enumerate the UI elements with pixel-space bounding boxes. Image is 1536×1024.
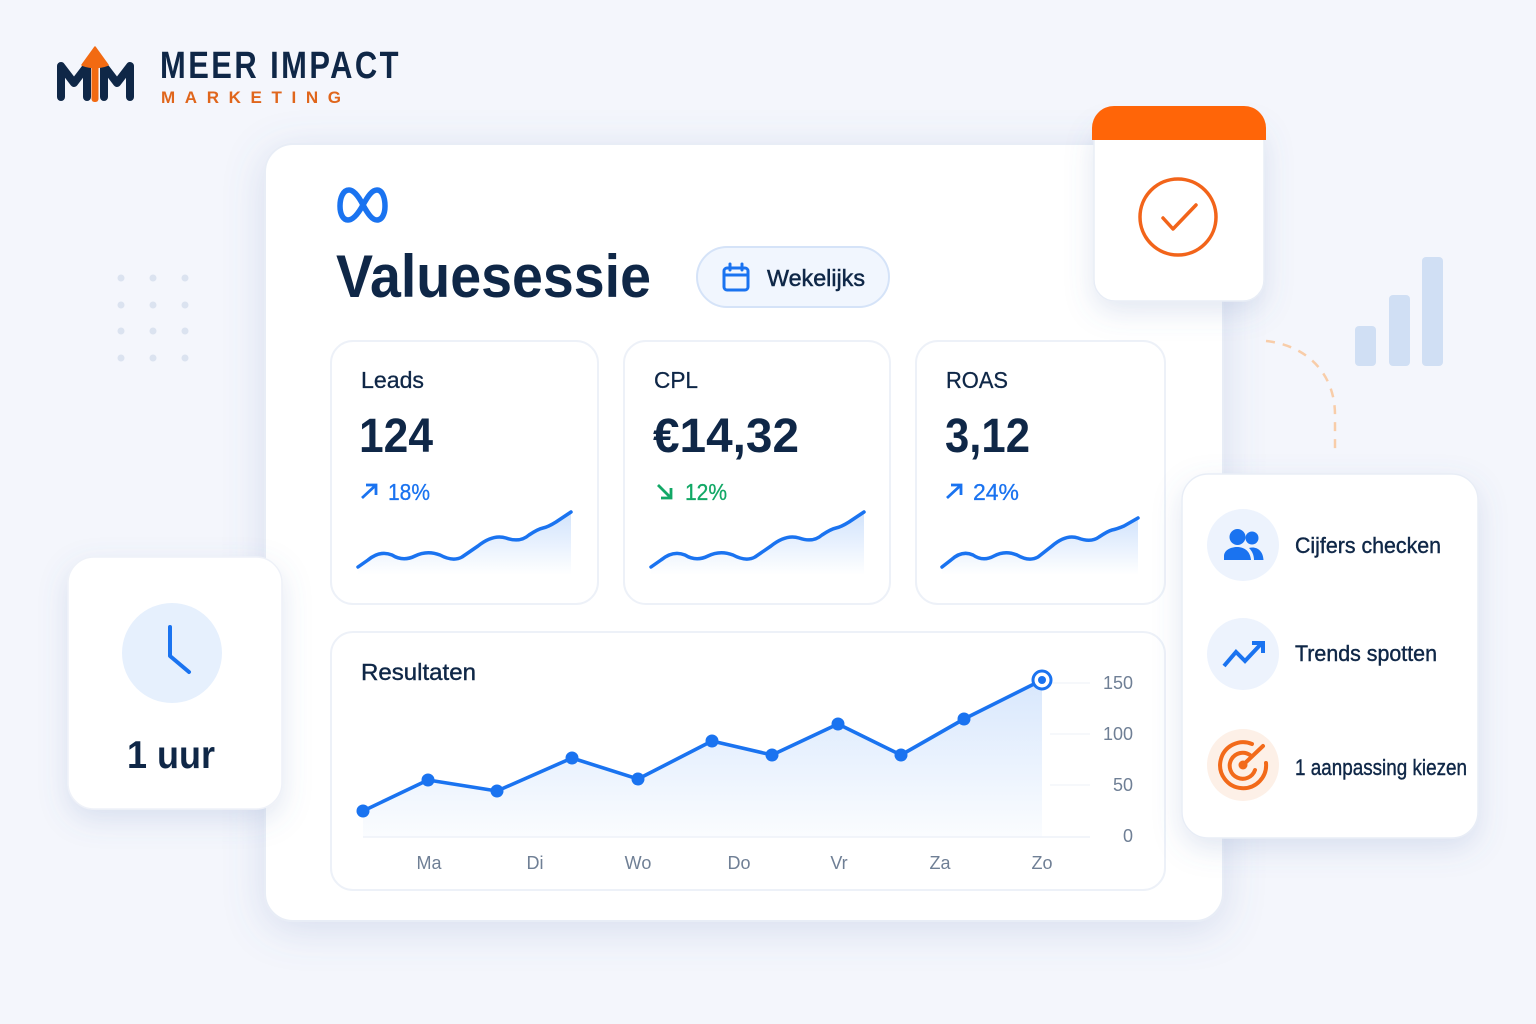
icon: arrow down — [658, 485, 671, 498]
decorative dashed arc — [1266, 341, 1335, 454]
x axis labels: Di — [526, 853, 544, 873]
x axis labels — [416, 853, 1053, 873]
sparkline: leads — [358, 512, 571, 575]
logo — [61, 45, 401, 107]
title: Valuesessie — [336, 243, 651, 310]
delta: 18%: 18% — [388, 479, 430, 505]
icon: calendar — [724, 264, 748, 290]
decorative bar chart — [1355, 257, 1443, 366]
x axis labels: Do — [727, 853, 751, 873]
badge: wekelijks — [697, 247, 889, 307]
heading: resultaten: Resultaten — [361, 659, 476, 685]
value: cpl: €14,32 — [653, 410, 799, 463]
label: cpl: CPL — [654, 367, 698, 393]
logo wordmark: MEER IMPACT — [160, 45, 401, 87]
panel: dashboard — [265, 144, 1223, 921]
decorative dot grid — [118, 274, 188, 362]
y axis labels: 50 — [1113, 775, 1133, 795]
item: trends spotten — [1207, 618, 1437, 690]
card: leads — [331, 341, 598, 604]
icon: target — [1207, 729, 1279, 801]
delta: 12%: 12% — [685, 479, 727, 505]
card: calendar check — [1092, 106, 1266, 301]
x axis labels: Wo — [625, 853, 651, 873]
label: leads: Leads — [361, 367, 424, 393]
icon: arrow up — [362, 485, 376, 498]
panel: checklist — [1182, 474, 1478, 838]
value: roas: 3,12 — [945, 410, 1030, 463]
icon: clock — [122, 603, 222, 703]
card: duration — [68, 557, 282, 809]
y axis labels — [1103, 673, 1133, 846]
card: cpl — [624, 341, 890, 604]
logo tagline: MARKETING — [161, 88, 341, 107]
icon: arrow up — [947, 485, 961, 498]
y axis labels: 0 — [1123, 826, 1133, 846]
text: Cijfers checken — [1295, 533, 1441, 558]
x axis labels: Zo — [1031, 853, 1053, 873]
x axis labels: Za — [929, 853, 951, 873]
sparkline: roas — [942, 518, 1138, 575]
icon: meta logo — [340, 190, 385, 220]
card: roas — [916, 341, 1165, 604]
text: 1 aanpassing kiezen — [1295, 755, 1467, 780]
y axis labels: 150 — [1103, 673, 1133, 693]
x axis labels: Vr — [830, 853, 848, 873]
x axis labels: Ma — [416, 853, 442, 873]
sparkline: cpl — [651, 512, 864, 575]
value: 124: 124 — [359, 410, 433, 463]
icon: people — [1207, 509, 1279, 581]
logo mark — [61, 47, 130, 102]
item: cijfers checken — [1207, 509, 1441, 581]
calendar header — [1092, 106, 1266, 140]
panel: resultaten — [331, 632, 1165, 890]
badge label: Wekelijks — [767, 265, 865, 291]
y axis labels: 100 — [1103, 724, 1133, 744]
label: roas: ROAS — [946, 367, 1008, 393]
text: Trends spotten — [1295, 641, 1437, 666]
icon: trend arrow — [1207, 618, 1279, 690]
item: 1 aanpassing kiezen — [1207, 729, 1467, 801]
line chart — [356, 671, 1090, 837]
icon: check circle — [1140, 179, 1216, 255]
duration label: 1 uur — [127, 734, 215, 777]
delta: 24%: 24% — [973, 479, 1019, 505]
